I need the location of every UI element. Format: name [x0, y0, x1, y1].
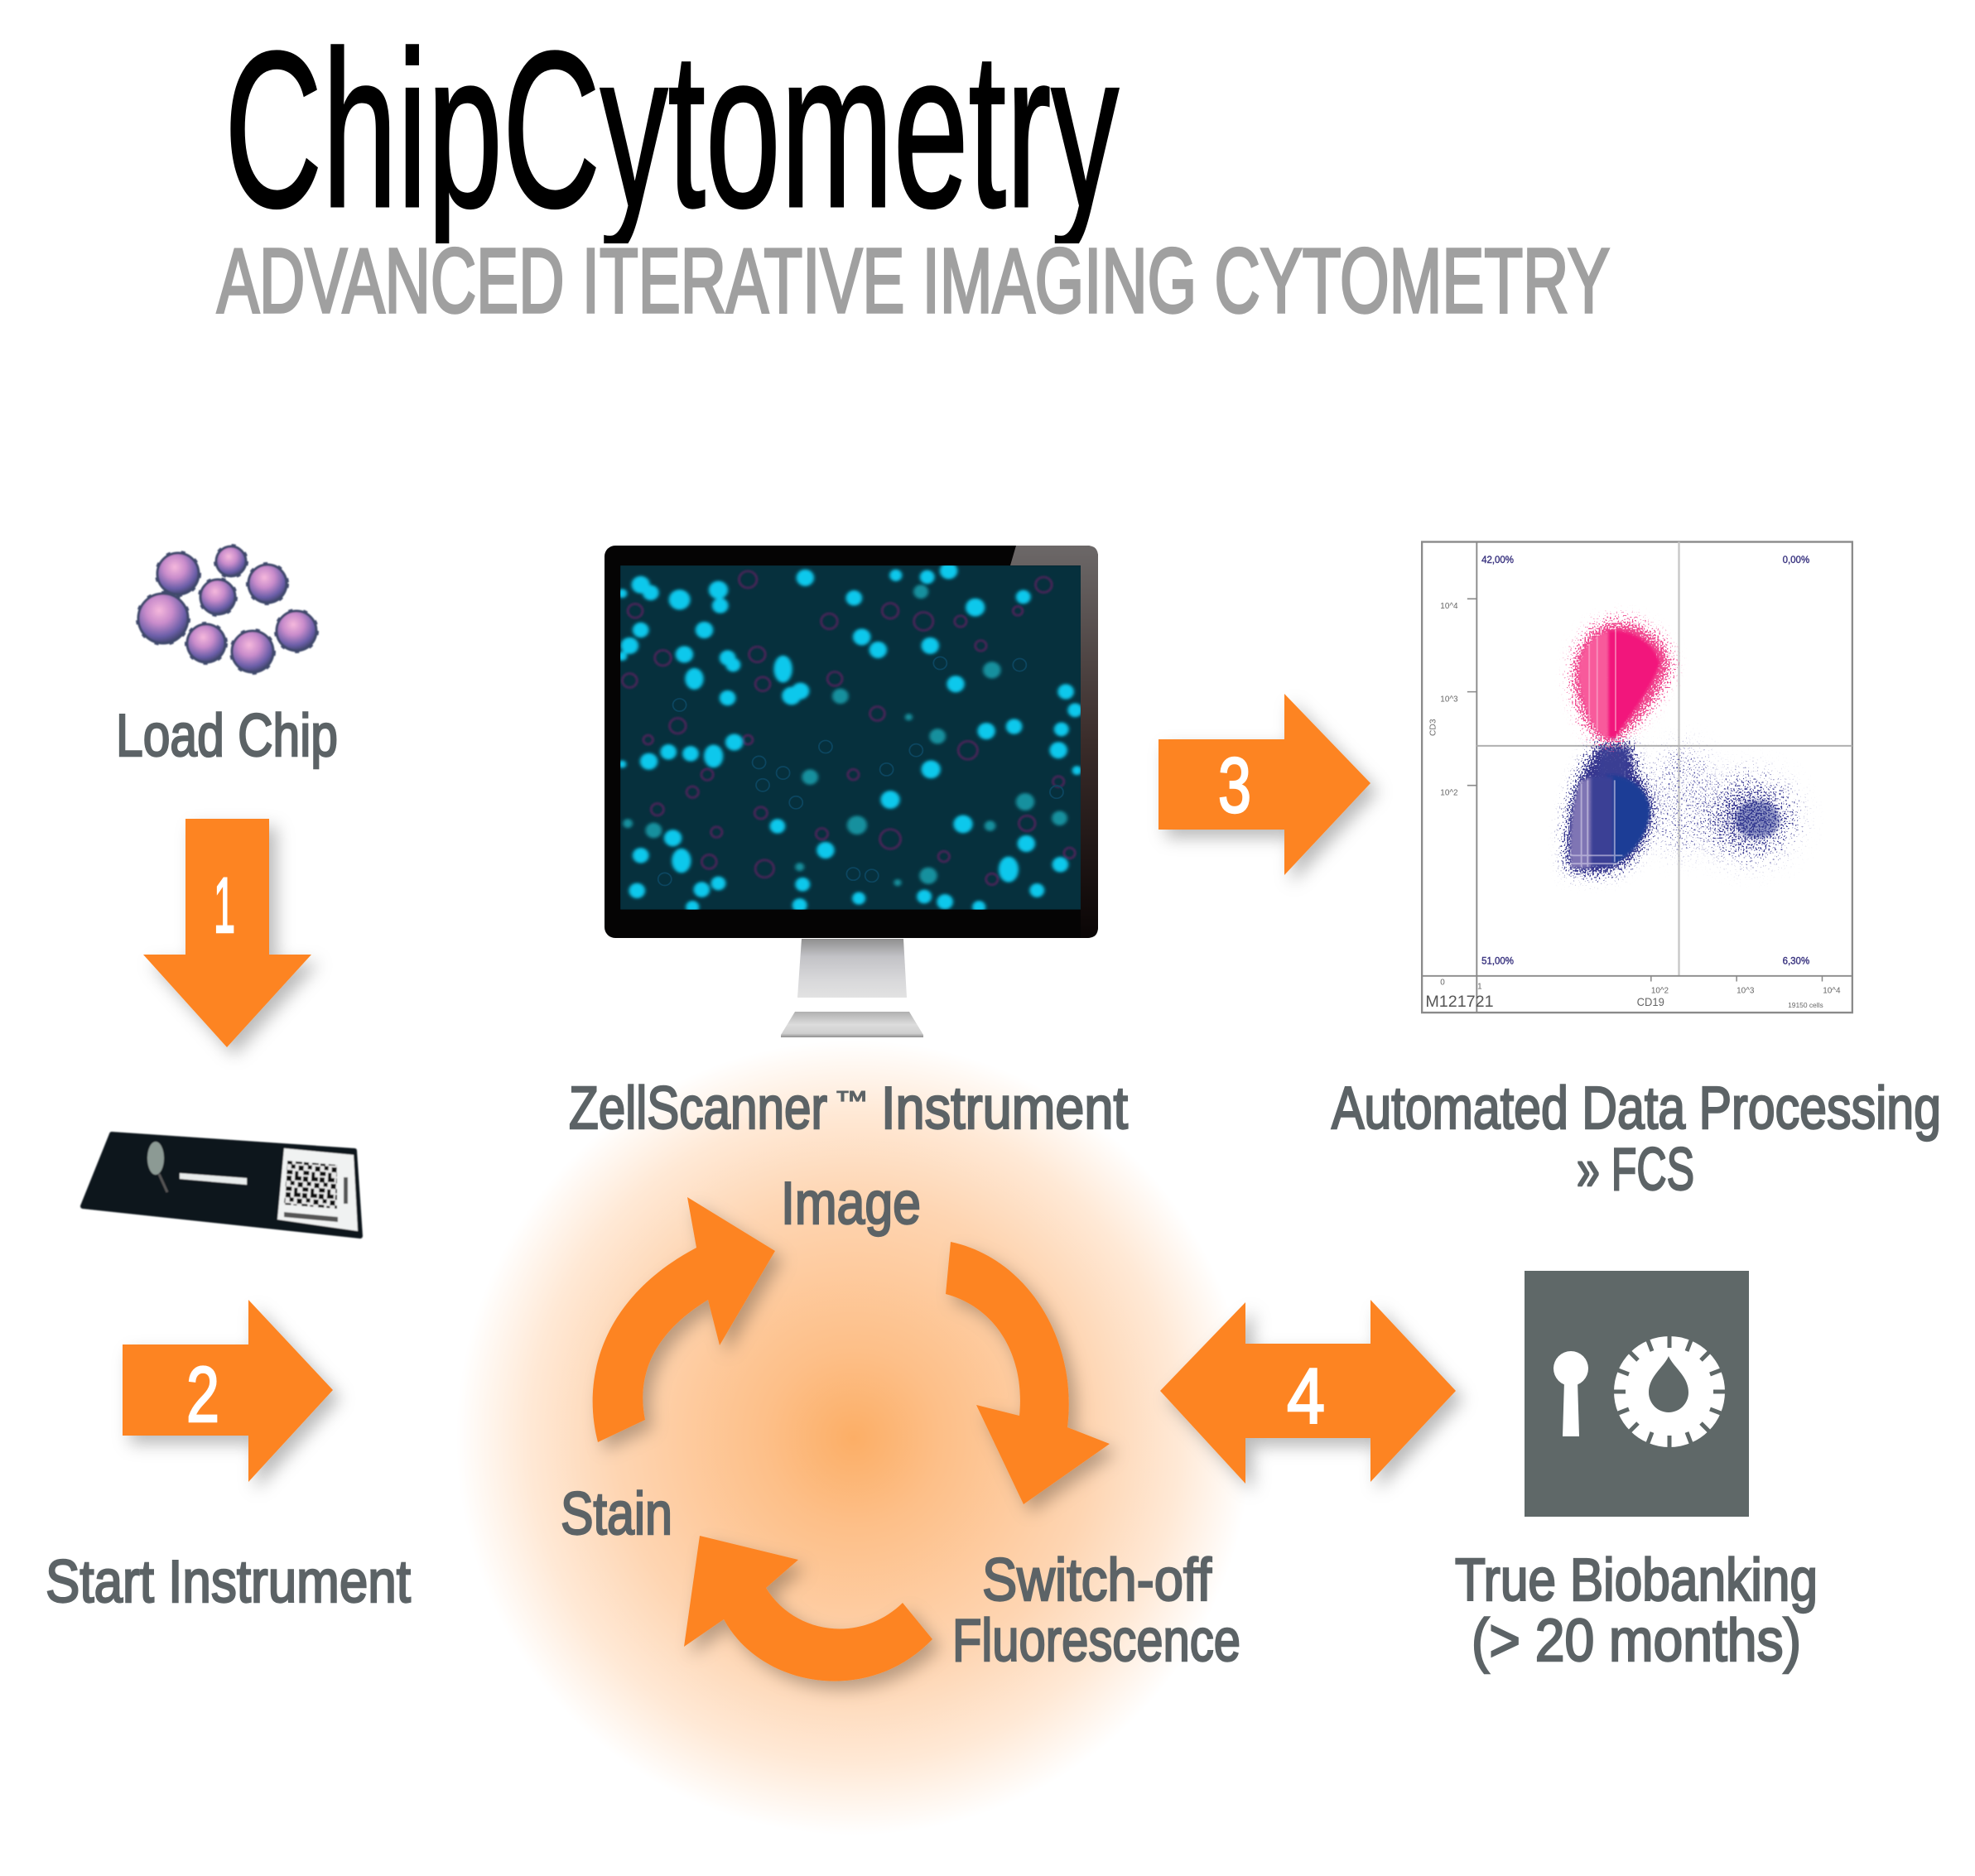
arrow 4: double-headed: [1160, 1300, 1456, 1484]
axis tick labels: 10^4: [1440, 602, 1458, 611]
arrow 4: double-headed: 4: [1287, 1353, 1325, 1441]
label: Automated Data Processing FCS: [1332, 1075, 1941, 1203]
label: True Biobanking: [1455, 1547, 1818, 1674]
arrow 1: down: 1: [214, 862, 235, 950]
monitor: ZellScanner instrument: [605, 546, 1098, 1037]
label: Start Instrument: Start Instrument: [46, 1549, 411, 1615]
icon: chip slide: [83, 1134, 360, 1236]
label: Stain: Stain: [561, 1481, 672, 1547]
axis tick labels: CD19: [1637, 996, 1664, 1008]
axis tick labels: 19150 cells: [1788, 1001, 1823, 1009]
keyhole: [1554, 1351, 1588, 1436]
bright cyan cells: [618, 562, 1082, 913]
axis tick labels: [1425, 602, 1841, 1011]
label: True Biobanking: (> 20 months): [1472, 1608, 1801, 1674]
label: Load Chip: Load Chip: [116, 703, 338, 769]
arrow 3: right: [1159, 694, 1370, 875]
pink upper population: [1574, 622, 1670, 743]
axis tick labels: 1: [1477, 983, 1482, 992]
axis tick labels: 0: [1440, 978, 1445, 988]
label: True Biobanking: True Biobanking: [1455, 1547, 1818, 1614]
axis tick labels: 10^3: [1440, 695, 1458, 705]
label: ZellScanner Instrument: ZellScanner: [569, 1075, 827, 1142]
cycle arrow: image to switch-off: [946, 1242, 1110, 1504]
axis tick labels: M121721: [1425, 993, 1494, 1011]
label: ZellScanner Instrument: [569, 1075, 1128, 1142]
arrow 3: right: 3: [1218, 742, 1251, 830]
monitor bezel: [605, 546, 1098, 938]
label: Automated Data Processing FCS: » FCS: [1577, 1137, 1694, 1203]
label: Switch-off Fluorescence: Fluorescence: [952, 1608, 1240, 1674]
label: Image: Image: [781, 1171, 921, 1237]
cycle arrow: switch-off to stain: [684, 1536, 932, 1681]
cycle arrow: stain to image: [593, 1197, 775, 1442]
dial: [1614, 1336, 1725, 1447]
dim cyan cells: [623, 584, 1067, 886]
label: ZellScanner Instrument: ™: [834, 1085, 869, 1115]
quadrant percentages: 42,00%: [1481, 555, 1514, 565]
axis tick labels: CD3: [1429, 719, 1438, 736]
magenta cell outlines: [622, 571, 1075, 885]
quadrant percentages: 51,00%: [1481, 955, 1514, 967]
sparse events between populations: [1645, 744, 1721, 855]
icon: biobank safe: [1525, 1271, 1749, 1517]
axis tick labels: 10^2: [1440, 788, 1458, 798]
blue lower-left population: [1567, 744, 1652, 873]
blue lower-right population: [1708, 782, 1790, 854]
arrow 2: right: [123, 1300, 333, 1482]
title: ChipCytometry: [224, 5, 1119, 255]
quadrant percentages: [1481, 555, 1809, 967]
monitor screen with fluorescence micrograph: [618, 562, 1082, 913]
monitor stand: [781, 939, 923, 1037]
axis tick labels: 10^2: [1651, 986, 1669, 995]
label: Switch-off Fluorescence: Switch-off: [982, 1547, 1212, 1614]
label: ZellScanner Instrument: Instrument: [881, 1075, 1128, 1142]
quadrant percentages: 6,30%: [1783, 955, 1809, 967]
chart: flow cytometry scatter plot: [1422, 542, 1852, 1013]
icon: cells: [137, 546, 317, 673]
quadrant percentages: 0,00%: [1783, 555, 1809, 565]
plot frame and gates: [1422, 542, 1852, 1013]
axis tick labels: 10^3: [1737, 986, 1755, 995]
orange glow behind the iterative cycle: [456, 1041, 1251, 1835]
arrow 1: down: [143, 819, 311, 1047]
axis tick labels: 10^4: [1823, 986, 1841, 995]
label: Switch-off Fluorescence: [952, 1547, 1240, 1674]
arrow 2: right: 2: [186, 1351, 219, 1439]
